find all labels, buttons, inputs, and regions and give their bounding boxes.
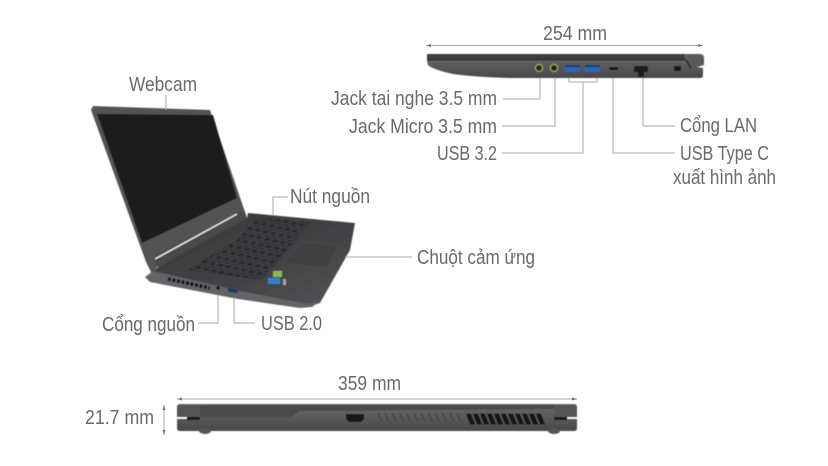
callout: Jack tai nghe: Jack tai nghe 3.5 mm (331, 88, 497, 110)
callout: USB Type C (613, 78, 776, 189)
rear faint vents (379, 413, 465, 421)
callout: Webcam: Webcam (129, 74, 197, 96)
side vents (168, 279, 210, 288)
callout: Cổng nguồn: Cổng nguồn (102, 314, 195, 336)
dimension: 254 mm (426, 23, 703, 47)
callout: USB 2.0: USB 2.0 (261, 313, 322, 335)
power port (216, 286, 220, 290)
laptop: rear view (177, 404, 577, 434)
callout: USB Type C: xuất hình ảnh (673, 167, 776, 189)
rear hdmi port (346, 414, 364, 422)
callout: Jack tai nghe (331, 78, 540, 110)
callout: Chuột cảm ứng: Chuột cảm ứng (417, 247, 535, 269)
dimension: 21.7 mm: 21.7 mm (85, 407, 154, 429)
laptop hinge highlight (153, 212, 247, 267)
side view body (427, 54, 704, 78)
rear vents (468, 414, 544, 424)
dimension: 359 mm (177, 373, 577, 400)
laptop front edge (145, 271, 320, 308)
laptop: three-quarter view (91, 106, 355, 308)
stickers (268, 271, 286, 285)
usb type c port (609, 67, 618, 70)
callout: Nút nguồn (273, 186, 370, 215)
callout: Cổng LAN: Cổng LAN (680, 115, 757, 137)
lock slot (674, 66, 681, 71)
rear lid band (200, 405, 554, 417)
callout: USB Type C: USB Type C (680, 143, 769, 165)
callout: USB 3.2: USB 3.2 (437, 143, 497, 165)
lan port (634, 66, 648, 77)
callout: Jack Micro: Jack Micro 3.5 mm (349, 116, 497, 138)
callout: Cổng LAN (643, 78, 757, 137)
callout: Cổng nguồn (102, 295, 218, 336)
usb 2.0 port (228, 288, 238, 293)
callout: Webcam (129, 74, 197, 110)
dimension: 359 mm: 359 mm (338, 373, 401, 395)
dimension: 254 mm: 254 mm (543, 23, 607, 45)
usb 3.2 ports (565, 65, 600, 72)
keyboard (187, 217, 310, 280)
callout: Nút nguồn: Nút nguồn (290, 186, 370, 208)
callout: Jack Micro (349, 78, 555, 138)
callout: USB 3.2 (437, 78, 597, 165)
audio jacks (535, 64, 558, 72)
rear view body (177, 404, 577, 431)
callout: USB 2.0 (234, 298, 322, 335)
laptop lid (91, 106, 247, 274)
rear hinges (177, 405, 577, 420)
laptop: side view with ports (427, 54, 704, 78)
rear feet (199, 428, 560, 434)
touchpad (283, 242, 338, 268)
laptop screen (97, 114, 237, 243)
laptop deck (153, 213, 355, 307)
